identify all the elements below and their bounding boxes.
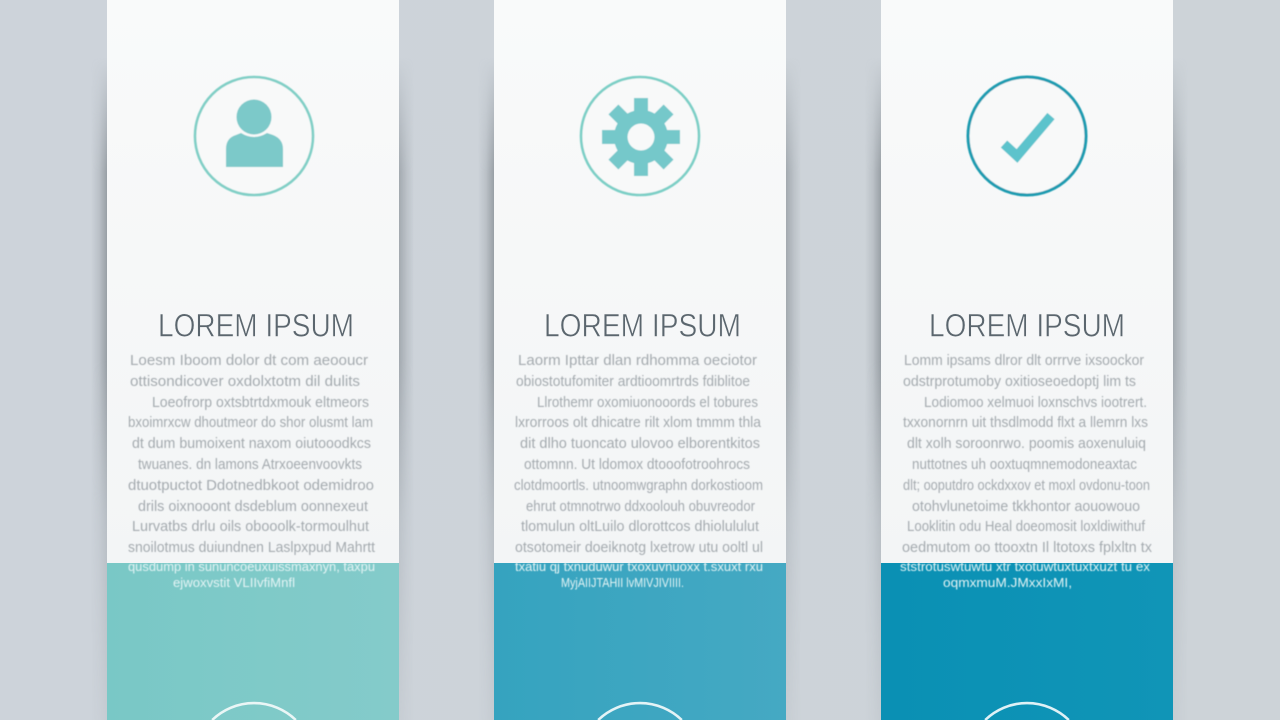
body text 1: Loeofrorp oxtsbtrtdxmouk eltmeors [152, 394, 369, 411]
body text 3: oedmutom oo ttooxtn Il ltotoxs fplxltn tx [902, 539, 1152, 556]
body text 2: tlomulun oltLuilo dlorottcos dhiolululut [521, 518, 760, 535]
colour band 2 [494, 563, 786, 720]
body text 2: Llrothemr oxomiuonooords el tobures [537, 394, 758, 411]
body text 3: Looklitin odu Heal doeomosit loxldiwithuf [907, 518, 1146, 535]
body text 2: dit dlho tuoncato ulovoo elborentkitos [520, 435, 760, 452]
body text 1: drils oixnooont dsdeblum oonnexeut [138, 498, 369, 515]
body text 1 [128, 352, 376, 590]
panel: column 2 [478, 0, 801, 720]
icon: gear in circle [581, 77, 699, 195]
card background 1 [107, 0, 399, 564]
body text 2 [514, 352, 763, 590]
body text 3 [900, 352, 1152, 590]
card background 3 [881, 0, 1173, 564]
body text 1: Loesm Iboom dolor dt com aeooucr [130, 352, 368, 369]
body text 1: bxoimrxcw dhoutmeor do shor olusmt lam [128, 414, 373, 431]
heading 1: LOREM IPSUM [158, 308, 354, 344]
body text 2: ehrut otmnotrwo ddxoolouh obuvreodor [526, 498, 755, 515]
body text 2: txatiu qj txnuduwur txoxuvnuoxx t.sxuxt rxu [515, 559, 763, 574]
icon: bottom circle arc 1 [212, 703, 296, 720]
body text 1: ottisondicover oxdolxtotm dil dulits [130, 373, 360, 390]
body text 1: dtuotpuctot Ddotnedbkoot odemidroo [128, 477, 374, 494]
body text 3: dlt; ooputdro ockdxxov et moxl ovdonu-toon [903, 477, 1150, 494]
body text 2: MyjAIIJTAHII lvMIVJIVIIII. [561, 575, 684, 590]
body text 3: odstrprotumoby oxitioseoedoptj lim ts [903, 373, 1136, 390]
panel: column 1 [91, 0, 414, 720]
body text 3: ststrotuswtuwtu xtr txotuwtuxtuxtxuzt tu ex [900, 559, 1151, 574]
body text 2: Laorm Ipttar dlan rdhomma oeciotor [518, 352, 757, 369]
body text 3: oqmxmuM.JMxxIxMI, [943, 575, 1072, 590]
body text 1: Lurvatbs drlu oils obooolk-tormoulhut [132, 518, 370, 535]
body text 1: qusdump in sununcoeuxuissmaxnyn, taxpu [128, 559, 375, 574]
body text 1: dt dum bumoixent naxom oiutooodkcs [132, 435, 371, 452]
body text 2: lxrorroos olt dhicatre rilt xlom tmmm thla [515, 414, 762, 431]
icon: check mark in circle [968, 77, 1086, 195]
icon: bottom circle arc 2 [598, 703, 682, 720]
body text 3: txxonornrn uit thsdlmodd flxt a llemrn lxs [903, 414, 1148, 431]
body text 2: ottomnn. Ut ldomox dtooofotroohrocs [524, 456, 750, 473]
icon: person in circle [195, 77, 313, 195]
body text 3: otohvlunetoime tkkhontor aouowouo [912, 498, 1140, 515]
body text 3: Lodiomoo xelmuoi loxnschvs iootrert. [924, 394, 1147, 411]
icon: bottom circle arc 3 [985, 703, 1069, 720]
body text 3: dlt xolh soroonrwo. poomis aoxenuluiq [907, 435, 1146, 452]
body text 2: clotdmoortls. utnoomwgraphn dorkostioom [514, 477, 763, 494]
body text 1: ejwoxvstit VLIIvfiMnfl [173, 575, 295, 590]
body text 3: Lomm ipsams dlror dlt orrrve ixsoockor [904, 352, 1144, 369]
card background 2 [494, 0, 786, 564]
colour band 3 [881, 563, 1173, 720]
body text 2: otsotomeir doeiknotg lxetrow utu ooltl ul [515, 539, 763, 556]
body text 1: twuanes. dn lamons Atrxoeenvoovkts [138, 456, 362, 473]
body text 2: obiostotufomiter ardtioomrtrds fdiblitoe [516, 373, 750, 390]
colour band 1 [107, 563, 399, 720]
panel: column 3 [865, 0, 1188, 720]
heading 3: LOREM IPSUM [929, 308, 1125, 344]
heading 2: LOREM IPSUM [544, 308, 741, 344]
body text 1: snoilotmus duiundnen Laslpxpud Mahrtt [128, 539, 376, 556]
body text 3: nuttotnes uh ooxtuqmnemodoneaxtac [912, 456, 1137, 473]
